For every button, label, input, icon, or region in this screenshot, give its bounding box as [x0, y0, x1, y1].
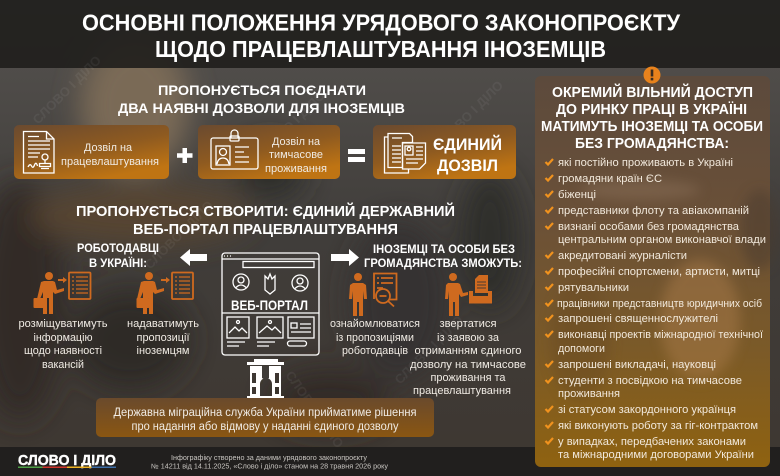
heading: foreigners: ГРОМАДЯНСТВА ЗМОЖУТЬ: — [364, 258, 522, 270]
text: apply for permit: із заявою за — [437, 332, 500, 344]
watermarks: СЛОВО І ДІЛО — [142, 198, 216, 272]
icon: government building — [247, 359, 284, 400]
panel: single permit — [373, 125, 516, 179]
arrow: right — [331, 249, 359, 266]
panel: free labour market access — [535, 66, 780, 467]
watermarks: СЛОВО І ДІЛО — [254, 88, 328, 162]
callout: migration service decision — [96, 398, 434, 437]
icon: person with magnifier — [349, 273, 396, 316]
text: provide offers — [127, 318, 199, 357]
source note — [151, 454, 389, 470]
label: ЄДИНИЙ — [433, 135, 502, 154]
text: apply for permit: звертатися — [440, 318, 497, 330]
checklist: проживання — [558, 388, 620, 400]
text: apply for permit: отриманням єдиного — [414, 345, 522, 357]
panel: temporary residence permit — [198, 125, 340, 179]
source note: Інфографіку створено за даними урядового законопроєкту — [171, 454, 368, 462]
portal label: ВЕБ-ПОРТАЛ — [231, 298, 308, 313]
arrow: left — [180, 249, 207, 266]
plus sign — [177, 148, 192, 163]
checklist: центральним органом виконавчої влади — [558, 234, 766, 246]
title: ОСНОВНІ ПОЛОЖЕННЯ УРЯДОВОГО ЗАКОНОПРОЄКТУ — [82, 10, 681, 36]
text: apply for permit: працевлаштування — [413, 385, 511, 397]
text: apply for permit: проживання та — [430, 372, 506, 384]
text: apply for permit: дозволу на тимчасове — [410, 359, 526, 371]
checklist — [546, 157, 766, 461]
text: review offers: ознайомлюватися — [330, 318, 420, 330]
text: provide offers: іноземцям — [136, 345, 190, 357]
heading: employers: РОБОТОДАВЦІ — [77, 243, 159, 255]
icon: warning — [644, 66, 660, 84]
heading: employers: В УКРАЇНІ: — [89, 257, 147, 270]
checklist: запрошені викладачі, науковці — [558, 359, 716, 371]
text: post vacancy information: інформацію — [34, 332, 92, 344]
watermarks: СЛОВО І ДІЛО — [283, 368, 347, 451]
text: provide offers: надаватимуть — [127, 318, 199, 330]
panel heading: ДО РИНКУ ПРАЦІ В УКРАЇНІ — [556, 101, 747, 118]
callout: migration service decision: Державна міграційна служба України прийматиме рішення — [114, 407, 416, 419]
icon: employer offering list — [136, 272, 193, 314]
title: ЩОДО ПРАЦЕВЛАШТУВАННЯ ІНОЗЕМЦІВ — [155, 36, 606, 62]
checklist: у випадках, передбачених законами — [558, 436, 746, 448]
checklist: професійні спортсмени, артисти, митці — [558, 266, 760, 278]
label: проживання — [265, 163, 327, 175]
text: post vacancy information: щодо наявності — [24, 345, 102, 357]
label: тимчасове — [269, 149, 323, 161]
label: Дозвіл на — [272, 136, 321, 148]
text: provide offers: пропозиції — [136, 332, 190, 344]
watermarks — [30, 53, 506, 451]
checklist: біженці — [558, 189, 596, 201]
label: працевлаштування — [61, 156, 159, 168]
panel heading: БЕЗ ГРОМАДЯНСТВА: — [575, 136, 729, 152]
checklist: виконавці проектів міжнародної технічної — [558, 329, 763, 341]
text: review offers — [330, 318, 420, 357]
heading: foreigners: ІНОЗЕМЦІ ТА ОСОБИ БЕЗ — [373, 244, 515, 256]
logo: СЛОВО І ДІЛО — [18, 453, 116, 469]
label — [433, 135, 502, 175]
checklist: запрошені священнослужителі — [558, 313, 718, 325]
checklist: визнані особами без громадянства — [558, 221, 740, 233]
text: post vacancy information: розміщуватимуть — [18, 318, 108, 330]
icon: person with document tray — [445, 273, 492, 316]
watermarks: СЛОВО І ДІЛО — [432, 78, 506, 152]
checklist: які постійно проживають в Україні — [558, 157, 733, 169]
text: post vacancy information — [18, 318, 108, 371]
text: review offers: роботодавців — [342, 345, 408, 357]
source note: № 14211 від 14.11.2025, «Слово і діло» станом на 28 травня 2026 року — [151, 462, 389, 470]
checklist: студенти з посвідкою на тимчасове — [558, 375, 742, 387]
heading: foreigners — [364, 244, 522, 270]
label: ДОЗВІЛ — [437, 156, 498, 175]
checklist: представники флоту та авіакомпаній — [558, 205, 749, 217]
heading: web portal: ПРОПОНУЄТЬСЯ СТВОРИТИ: ЄДИНИЙ ДЕРЖАВНИЙ — [76, 202, 455, 220]
label — [61, 142, 159, 168]
checklist: рятувальники — [558, 282, 629, 294]
header band — [0, 0, 780, 68]
heading: combine permits: ДВА НАЯВНІ ДОЗВОЛИ ДЛЯ ІНОЗЕМЦІВ — [118, 100, 405, 116]
heading: combine permits — [118, 82, 405, 116]
heading: web portal — [76, 202, 455, 238]
heading: combine permits: ПРОПОНУЄТЬСЯ ПОЄДНАТИ — [158, 82, 366, 98]
checklist: акредитовані журналісти — [558, 250, 687, 262]
title — [82, 10, 681, 62]
panel heading: ОКРЕМИЙ ВІЛЬНИЙ ДОСТУП — [552, 83, 753, 101]
icon: document with stamp — [24, 132, 54, 173]
equals sign — [348, 149, 365, 162]
watermarks: СЛОВО І ДІЛО — [30, 53, 104, 127]
checklist: зі статусом закордонного українця — [558, 404, 736, 416]
icon: id badge — [211, 130, 258, 169]
label — [265, 136, 327, 175]
text: review offers: із пропозиціями — [336, 332, 414, 344]
footer band — [0, 447, 780, 476]
callout: migration service decision: про надання або відмову у наданні єдиного дозволу — [132, 421, 399, 433]
panel heading — [541, 83, 763, 152]
panel: work permit — [14, 125, 169, 179]
panel heading: МАТИМУТЬ ІНОЗЕМЦІ ТА ОСОБИ — [541, 119, 763, 135]
icon: combined documents — [384, 134, 426, 173]
icon: web portal — [222, 253, 319, 355]
checklist: допомоги — [558, 343, 605, 355]
checklist: громадяни країн ЄС — [558, 173, 662, 185]
icon: employer posting list — [34, 272, 90, 314]
heading: employers — [77, 243, 159, 270]
watermarks: СЛОВО І ДІЛО — [392, 313, 466, 387]
checklist: та міжнародними договорами України — [558, 449, 754, 461]
label: Дозвіл на — [84, 142, 133, 154]
heading: web portal: ВЕБ-ПОРТАЛ ПРАЦЕВЛАШТУВАННЯ — [133, 221, 398, 238]
checklist: працівники представництв юридичних осіб — [557, 298, 762, 310]
text: apply for permit — [410, 318, 526, 397]
checklist: які виконують роботу за гіг-контрактом — [558, 420, 758, 432]
text: post vacancy information: вакансій — [42, 359, 84, 371]
